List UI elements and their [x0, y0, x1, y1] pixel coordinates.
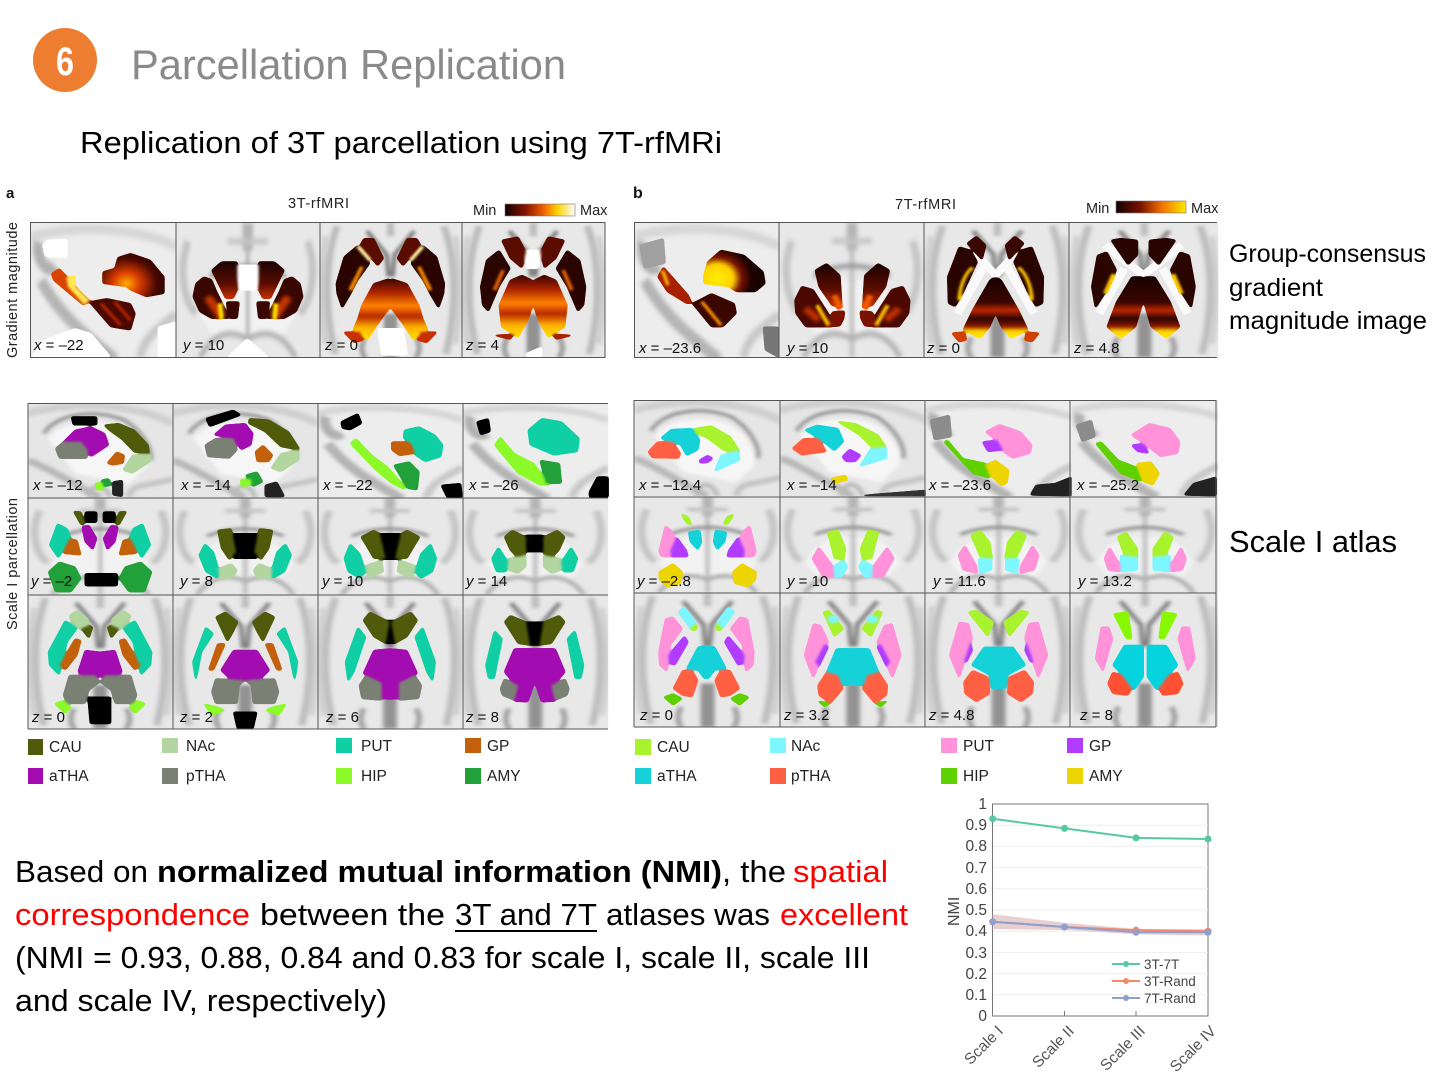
icon: section number badge: 6 — [56, 40, 74, 84]
slice: y = 10 heat map — [176, 223, 320, 358]
y axis tick labels: 0.9 — [965, 817, 987, 834]
text: Scale I atlas: Scale I atlas — [1229, 524, 1397, 559]
slice: z = 0 parcellation — [635, 593, 781, 727]
slice: y = 11.6 parcellation — [926, 496, 1072, 593]
chart: NMI by scale — [946, 796, 1220, 1076]
y axis tick labels: 0.4 — [965, 923, 987, 940]
legend: 3T regions — [28, 738, 521, 785]
slice coordinate labels: z = 4.8 — [1073, 340, 1119, 357]
slice coordinate labels: z = 0 — [926, 340, 960, 357]
slice coordinate labels: y = 13.2 — [1077, 573, 1132, 590]
series: 3T-Rand — [993, 922, 1210, 934]
slice: z = 6 parcellation — [318, 595, 462, 729]
slice: z = 0 heat map — [925, 222, 1070, 358]
axis label: scale I parcellation: Scale I parcellation — [5, 498, 21, 630]
panel label b: b — [633, 185, 643, 202]
slice coordinate labels: x = –22 — [33, 337, 84, 354]
legend: 3T colour bar: Min — [473, 203, 496, 219]
legend: 3T regions: PUT — [361, 738, 393, 755]
text block: NMI conclusion: correspondence — [15, 897, 250, 932]
text block: NMI conclusion: excellent — [780, 897, 908, 932]
slice coordinate labels: y = 11.6 — [932, 573, 986, 590]
panel: 3T Scale I atlas slices — [28, 403, 608, 729]
slice coordinate labels: x = –22 — [322, 477, 373, 494]
slice coordinate labels: z = 6 — [325, 709, 359, 726]
legend: 3T regions: aTHA — [49, 768, 89, 785]
slice coordinate labels: z = 3.2 — [783, 707, 829, 724]
confidence band — [993, 914, 1208, 935]
slice: x = -14 parcellation — [781, 400, 926, 496]
text block: NMI conclusion: Based on — [15, 854, 148, 889]
panel: 7T gradient magnitude row — [635, 222, 1218, 360]
slice coordinate labels: y = –2.8 — [636, 573, 691, 590]
title: Parcellation Replication — [131, 41, 566, 88]
legend: 3T colour bar — [473, 203, 608, 219]
legend: 3T regions: pTHA — [186, 768, 226, 785]
panel: 3T gradient magnitude row — [31, 223, 605, 360]
slice coordinate labels: z = 4.8 — [928, 707, 974, 724]
text block: NMI conclusion: atlases was — [606, 897, 770, 932]
y axis tick labels — [965, 796, 987, 1025]
panel: 7T Scale I atlas slices — [635, 400, 1218, 727]
text: group-consensus gradient magnitude image: Group-consensus — [1229, 240, 1426, 268]
axis label: gradient magnitude: Gradient magnitude — [5, 222, 21, 358]
series: 7T-Rand — [990, 919, 1210, 935]
y axis tick labels: 0.2 — [965, 966, 987, 983]
slice: x = -23.6 parcellation — [926, 400, 1072, 498]
legend: 3T regions: NAc — [186, 738, 216, 755]
slice: z = 4.8 parcellation — [926, 593, 1072, 727]
slice coordinate labels: y = 8 — [179, 573, 213, 590]
y axis tick labels: 0.8 — [965, 838, 987, 855]
slice: z = 8 parcellation — [462, 595, 608, 729]
y axis tick labels: 0 — [978, 1008, 987, 1025]
legend: 7T regions: CAU — [657, 739, 690, 756]
legend: 7T colour bar: Min — [1086, 201, 1109, 217]
slice: x = -22 parcellation — [318, 403, 462, 499]
slice: x = -23.6 heat map — [635, 222, 779, 360]
slice: z = 0 parcellation — [28, 595, 173, 729]
slice: y = 10 heat map — [779, 222, 925, 358]
text block: NMI conclusion: 3T and 7T — [455, 897, 597, 932]
chart legend: 3T-Rand — [1144, 974, 1196, 989]
legend: 3T colour bar: Max — [580, 203, 608, 219]
slice: y = 10 parcellation — [781, 496, 926, 593]
legend: 7T regions: AMY — [1089, 768, 1123, 785]
slice coordinate labels: y = 10 — [786, 573, 828, 590]
slice coordinate labels: y = 10 — [182, 337, 224, 354]
legend: 7T colour bar — [1086, 201, 1219, 217]
slice coordinate labels: x = –14 — [180, 477, 231, 494]
slice coordinate labels: x = –23.6 — [638, 340, 701, 357]
slice coordinate labels: z = 8 — [1079, 707, 1113, 724]
slice coordinate labels: x = –12 — [32, 477, 83, 494]
slice coordinate labels: z = 2 — [179, 709, 213, 726]
y axis tick labels: 1 — [978, 796, 987, 813]
legend: 7T colour bar: Max — [1191, 201, 1219, 217]
slice coordinate labels: y = 10 — [786, 340, 828, 357]
slice: x = -14 parcellation — [173, 403, 318, 497]
text block: NMI conclusion: normalized mutual information (NMI) — [157, 854, 722, 889]
text block: NMI conclusion — [15, 854, 908, 1018]
legend: 7T regions: GP — [1089, 738, 1111, 755]
slice coordinate labels: z = 8 — [465, 709, 499, 726]
x axis labels: Scale II — [1029, 1023, 1078, 1071]
text block: NMI conclusion: between the — [260, 897, 445, 932]
text block: NMI conclusion: spatial — [793, 854, 888, 889]
text: group-consensus gradient magnitude image: magnitude image — [1229, 307, 1427, 335]
slice coordinate labels: z = 0 — [639, 707, 673, 724]
slice coordinate labels: y = 14 — [465, 573, 507, 590]
slice coordinate labels: z = 4 — [465, 337, 499, 354]
y axis tick labels: 0.3 — [965, 945, 987, 962]
slice: x = -12.4 parcellation — [635, 400, 781, 496]
chart legend: 7T-Rand — [1144, 991, 1196, 1006]
legend: 3T regions: CAU — [49, 739, 82, 756]
x axis labels — [961, 1022, 1220, 1076]
heading: 3T-rfMRI: 3T-rfMRI — [288, 196, 349, 212]
chart legend: 3T-7T — [1144, 957, 1179, 972]
chart legend — [1112, 957, 1196, 1006]
slice: x = -25.2 parcellation — [1072, 400, 1218, 498]
legend: 7T regions — [635, 738, 1123, 785]
slice coordinate labels — [30, 337, 1139, 726]
slice: z = 2 parcellation — [173, 595, 318, 729]
slice coordinate labels: z = 0 — [324, 337, 358, 354]
slice: x = -22 heat map — [31, 223, 176, 360]
legend: 7T regions: NAc — [791, 738, 821, 755]
slice: z = 8 parcellation — [1072, 593, 1218, 727]
slice: z = 0 heat map — [320, 223, 462, 358]
slice: y = -2.8 parcellation — [635, 496, 781, 593]
slice coordinate labels: z = 0 — [31, 709, 65, 726]
slice: x = -26 parcellation — [462, 403, 608, 499]
slice: y = -2 parcellation — [28, 497, 173, 595]
slice: z = 4.8 heat map — [1070, 222, 1218, 358]
heading: 7T-rfMRI: 7T-rfMRI — [895, 197, 956, 213]
slice: y = 8 parcellation — [173, 497, 318, 595]
x axis labels: Scale III — [1097, 1023, 1149, 1074]
x axis labels: Scale IV — [1167, 1022, 1220, 1076]
y axis tick labels: 0.6 — [965, 881, 987, 898]
x axis labels: Scale I — [961, 1023, 1007, 1068]
y axis tick labels: 0.7 — [965, 860, 987, 877]
slice coordinate labels: x = –25.2 — [1076, 477, 1139, 494]
legend: 3T regions: HIP — [361, 768, 387, 785]
y axis title: NMI — [946, 897, 963, 926]
slice coordinate labels: y = –2 — [30, 573, 72, 590]
subtitle: Replication of 3T parcellation using 7T-rfMRi — [80, 125, 722, 160]
legend: 3T regions: GP — [487, 738, 509, 755]
text block: NMI conclusion: , the — [722, 854, 786, 889]
slice: z = 4 heat map — [462, 223, 605, 358]
y axis tick labels: 0.5 — [965, 902, 987, 919]
slice coordinate labels: y = 10 — [321, 573, 363, 590]
slice: x = -12 parcellation — [28, 403, 173, 497]
y axis tick labels: 0.1 — [965, 987, 987, 1004]
text: group-consensus gradient magnitude image: gradient — [1229, 274, 1323, 302]
slice: y = 14 parcellation — [462, 497, 608, 595]
series: 3T-7T — [990, 816, 1210, 842]
legend: 7T regions: PUT — [963, 738, 995, 755]
legend: 7T regions: HIP — [963, 768, 989, 785]
legend: 7T regions: aTHA — [657, 768, 697, 785]
slice coordinate labels: x = –26 — [468, 477, 519, 494]
slice: y = 10 parcellation — [318, 497, 462, 595]
slice coordinate labels: x = –23.6 — [928, 477, 991, 494]
text: group-consensus gradient magnitude image — [1229, 240, 1427, 335]
icon: section number badge — [33, 28, 97, 92]
slice: y = 13.2 parcellation — [1072, 496, 1218, 593]
slice coordinate labels: x = –12.4 — [638, 477, 701, 494]
slice: z = 3.2 parcellation — [781, 593, 926, 727]
slice coordinate labels: x = –14 — [786, 477, 837, 494]
text block: NMI conclusion: (NMI = 0.93, 0.88, 0.84 and 0.83 for scale I, scale II, scale III — [15, 940, 870, 975]
legend: 7T regions: pTHA — [791, 768, 831, 785]
panel label a: a — [6, 185, 15, 202]
text block: NMI conclusion: and scale IV, respectively) — [15, 983, 387, 1018]
legend: 3T regions: AMY — [487, 768, 521, 785]
